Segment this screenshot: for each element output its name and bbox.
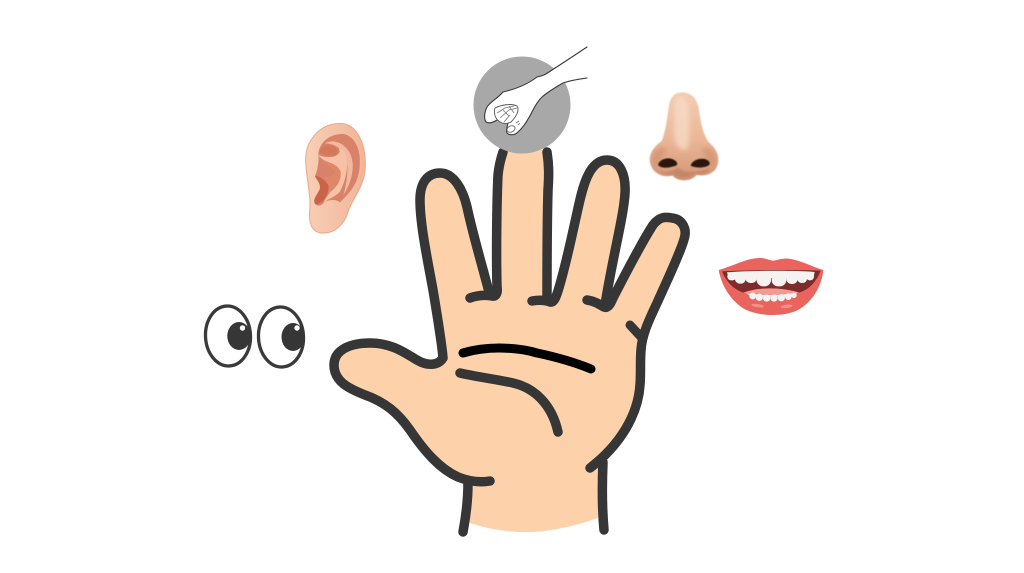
lip highlights <box>751 303 764 308</box>
life line <box>460 373 558 432</box>
hand outline: thumb and index finger <box>334 173 490 482</box>
mouth interior <box>722 270 821 293</box>
ear upper fold <box>319 145 337 156</box>
lower teeth <box>746 293 797 302</box>
icon: eyes <box>204 305 305 368</box>
curled fingers <box>494 105 518 123</box>
icon: nose <box>650 92 718 180</box>
hand fill <box>334 150 685 532</box>
icon: mouth <box>719 258 823 315</box>
tick mark at little finger <box>630 325 642 338</box>
hand outline: little finger and palm edge <box>587 217 685 468</box>
nose underside <box>656 168 711 178</box>
thumb nail <box>506 125 516 133</box>
hand outline: ring finger <box>532 160 625 305</box>
nose wing shading <box>652 147 717 170</box>
upper teeth <box>727 271 815 286</box>
left nostril <box>658 158 677 168</box>
left eye <box>204 305 252 367</box>
ear concha <box>321 159 341 193</box>
ear outer shape <box>306 123 365 233</box>
nose highlight <box>674 97 689 150</box>
hand outline: middle finger right side <box>547 152 549 297</box>
hand outline: middle finger left side <box>470 152 503 298</box>
pinching hand outline <box>485 47 587 135</box>
right nostril <box>691 159 710 168</box>
pinching hand fill <box>485 47 587 135</box>
antihelix ridge <box>325 141 353 195</box>
tongue <box>743 288 799 294</box>
icon: ear <box>306 123 365 233</box>
head line <box>463 348 591 369</box>
wrist lines <box>463 462 604 532</box>
icon: touch, hand on grey circle <box>474 47 587 154</box>
ear inner bowl <box>314 134 360 206</box>
hand illustration <box>334 150 685 532</box>
right eye <box>257 306 305 368</box>
lips <box>719 258 823 315</box>
nose shape <box>650 92 718 180</box>
